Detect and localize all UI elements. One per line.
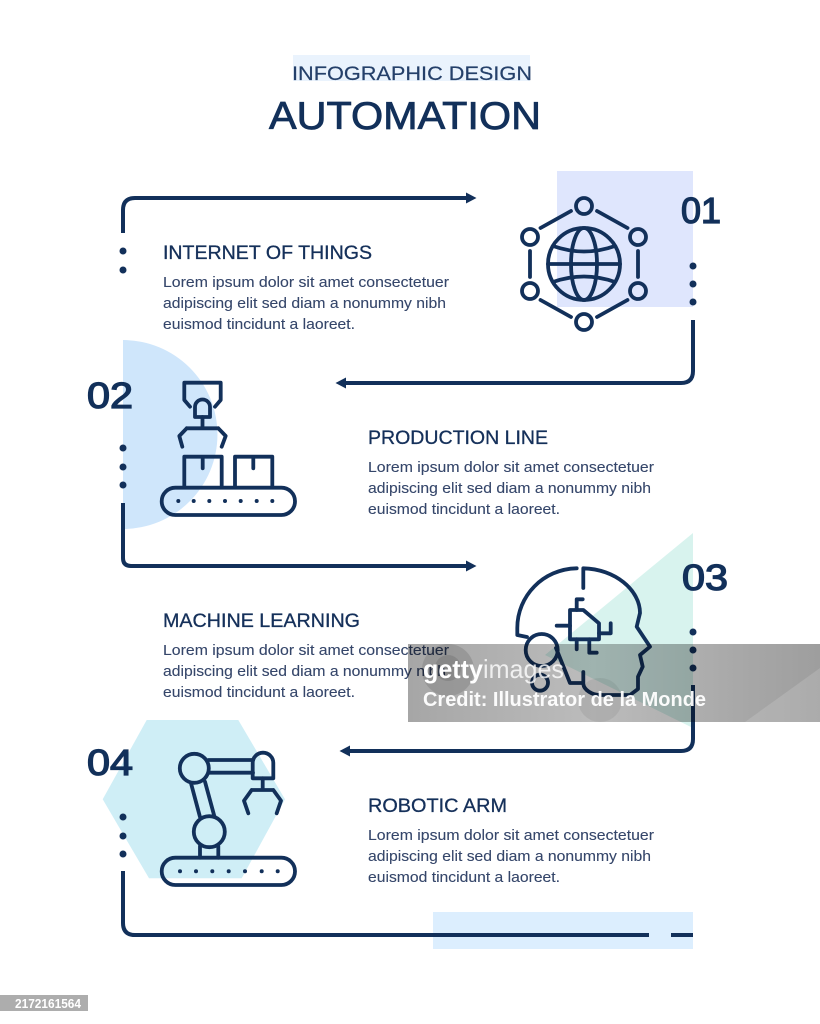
body text: euismod tincidunt a laoreet. bbox=[163, 685, 355, 701]
title: AUTOMATION bbox=[269, 95, 541, 138]
body text bbox=[163, 275, 449, 333]
connector arrow 2 bbox=[336, 262, 696, 388]
conveyor dots bbox=[176, 499, 274, 503]
body text: adipiscing elit sed diam a nonummy nibh bbox=[368, 849, 651, 865]
connector arrow 1 bbox=[120, 192, 476, 274]
number 04: 04 bbox=[87, 742, 133, 783]
background hexagon bbox=[103, 720, 285, 878]
body text bbox=[368, 460, 654, 518]
title block bbox=[269, 55, 541, 138]
body text: Lorem ipsum dolor sit amet consectetuer bbox=[368, 460, 654, 476]
conveyor dots bbox=[178, 869, 280, 873]
body text bbox=[368, 828, 654, 886]
body text: euismod tincidunt a laoreet. bbox=[163, 317, 355, 333]
watermark band bbox=[408, 644, 820, 722]
icon: production line bbox=[162, 383, 295, 515]
footer bar and closing line bbox=[120, 814, 693, 949]
icon: AI head bbox=[517, 568, 650, 695]
panel: production line bbox=[87, 262, 696, 529]
number 03: 03 bbox=[682, 557, 728, 598]
heading: MACHINE LEARNING bbox=[163, 611, 360, 632]
background square bbox=[557, 171, 693, 307]
body text: adipiscing elit sed diam a nonummy nibh bbox=[163, 664, 446, 680]
connector arrow 4 bbox=[340, 628, 696, 756]
subtitle: INFOGRAPHIC DESIGN bbox=[292, 63, 532, 85]
connector arrow 3 bbox=[120, 444, 476, 572]
watermark credit: Credit: Illustrator de la Monde bbox=[423, 689, 706, 711]
closing line bbox=[123, 871, 693, 935]
panel: machine learning bbox=[120, 444, 728, 728]
footer band bbox=[433, 912, 693, 949]
panel: internet of things bbox=[120, 171, 721, 333]
subtitle band bbox=[293, 55, 530, 81]
body text: Lorem ipsum dolor sit amet consectetuer bbox=[368, 828, 654, 844]
body text: adipiscing elit sed diam a nonummy nibh bbox=[163, 296, 446, 312]
icon: globe network bbox=[522, 198, 646, 330]
heading: INTERNET OF THINGS bbox=[163, 243, 372, 264]
panel: robotic arm bbox=[87, 628, 696, 886]
icon: robotic arm bbox=[162, 753, 295, 885]
image id tag: 2172161564 bbox=[15, 996, 82, 1011]
body text: euismod tincidunt a laoreet. bbox=[368, 502, 560, 518]
watermark bbox=[408, 644, 820, 722]
number 01: 01 bbox=[681, 190, 721, 231]
body text bbox=[163, 643, 449, 701]
heading: PRODUCTION LINE bbox=[368, 428, 548, 449]
body text: Lorem ipsum dolor sit amet consectetuer bbox=[163, 275, 449, 291]
body text: euismod tincidunt a laoreet. bbox=[368, 870, 560, 886]
background half circle bbox=[123, 340, 217, 529]
watermark logo text: gettyimages bbox=[423, 654, 564, 684]
background triangle bbox=[545, 533, 693, 728]
number 02: 02 bbox=[87, 375, 133, 416]
body text: adipiscing elit sed diam a nonummy nibh bbox=[368, 481, 651, 497]
body text: Lorem ipsum dolor sit amet consectetuer bbox=[163, 643, 449, 659]
heading: ROBOTIC ARM bbox=[368, 796, 507, 817]
